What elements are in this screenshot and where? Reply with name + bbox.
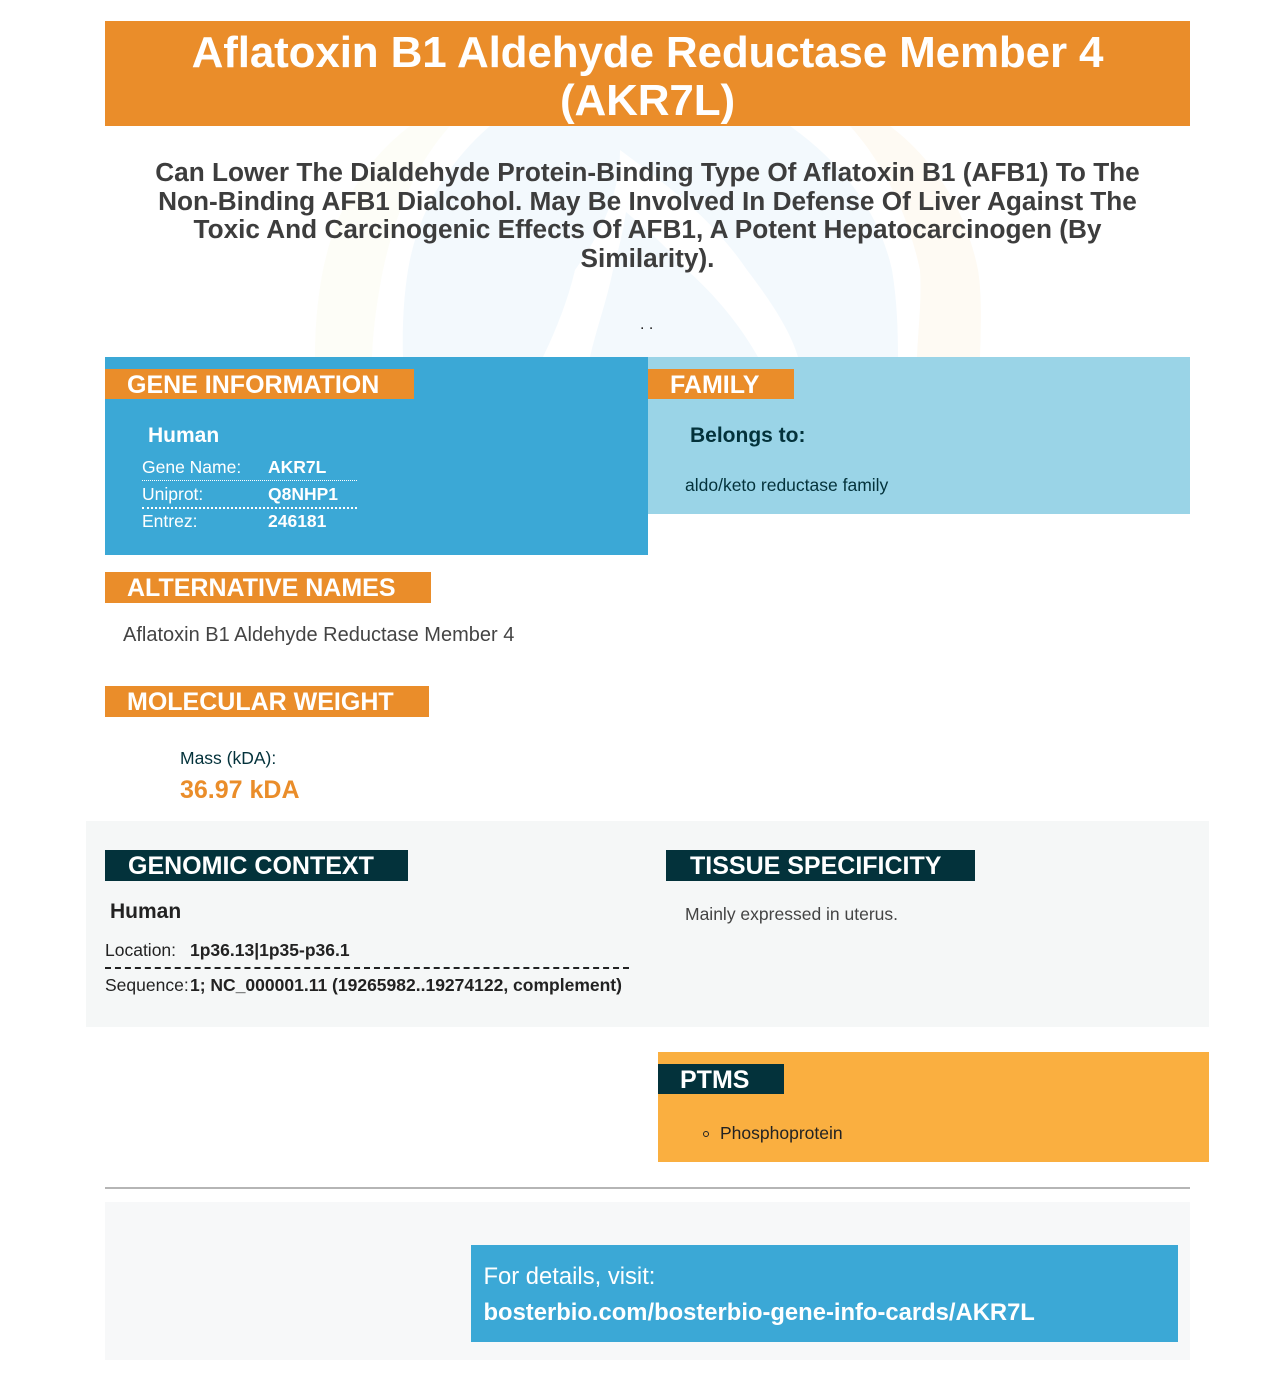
panel: molecular weight [105, 686, 429, 804]
subtitle description: Toxic And Carcinogenic Effects Of AFB1, A Potent Hepatocarcinogen (By [194, 214, 1101, 244]
panel: gene information [105, 357, 648, 555]
subtitle description: Similarity). [581, 243, 714, 273]
subtitle description [155, 157, 1140, 273]
heading: gene information: GENE INFORMATION [127, 371, 379, 399]
sequence row: Sequence: [105, 975, 189, 995]
heading: ptms: PTMS [680, 1066, 749, 1094]
family value: aldo/keto reductase family [685, 475, 888, 495]
dots note: . . [640, 316, 653, 333]
location row: Location: [105, 940, 176, 960]
sequence row: 1; NC_000001.11 (19265982..19274122, complement) [190, 975, 622, 995]
gene info table: Entrez: [142, 511, 197, 531]
divider [105, 967, 629, 969]
title banner [105, 21, 1190, 126]
alternative name text: Aflatoxin B1 Aldehyde Reductase Member 4 [123, 624, 514, 646]
callout: details link [471, 1245, 1178, 1342]
location row: 1p36.13|1p35-p36.1 [190, 940, 350, 960]
mass label: Mass (kDA): [180, 748, 276, 768]
background watermark [403, 126, 981, 357]
visit label: For details, visit: [484, 1263, 655, 1290]
gene info table: Uniprot: [142, 484, 203, 504]
gene info table: Q8NHP1 [268, 484, 338, 504]
gene info table [142, 457, 357, 531]
ptm item: Phosphoprotein [720, 1123, 843, 1143]
heading: genomic context: GENOMIC CONTEXT [128, 852, 374, 880]
heading: family [648, 369, 794, 399]
species label: Human [110, 900, 181, 923]
heading: alternative names: ALTERNATIVE NAMES [127, 574, 396, 602]
heading: molecular weight: MOLECULAR WEIGHT [127, 688, 394, 716]
belongs to label: Belongs to: [690, 424, 806, 447]
panel: footer [105, 1202, 1190, 1360]
subtitle description: Can Lower The Dialdehyde Protein-Binding Type Of Aflatoxin B1 (AFB1) To The [155, 157, 1140, 187]
heading: family: FAMILY [670, 371, 759, 399]
panel: ptms [658, 1052, 1209, 1162]
ptm bullet icon [703, 1131, 709, 1137]
panel: genomic context and tissue specificity [86, 821, 1209, 1027]
heading: tissue specificity: TISSUE SPECIFICITY [690, 852, 941, 880]
mass value: 36.97 kDA [180, 776, 300, 804]
species label: Human [148, 424, 219, 447]
title banner: (AKR7L) [560, 76, 735, 124]
subtitle description: Non-Binding AFB1 Dialcohol. May Be Involved In Defense Of Liver Against The [158, 186, 1137, 216]
title banner: Aflatoxin B1 Aldehyde Reductase Member 4 [192, 28, 1103, 76]
panel: alternative names [105, 572, 514, 646]
gene info table: Gene Name: [142, 457, 241, 477]
location row [105, 940, 350, 960]
gene info table: AKR7L [268, 457, 326, 477]
url: bosterbio.com/bosterbio-gene-info-cards/AKR7L [484, 1299, 1035, 1326]
gene info table: 246181 [268, 511, 326, 531]
heading: ptms [658, 1064, 784, 1094]
panel: family [648, 357, 1190, 514]
tissue specificity text: Mainly expressed in uterus. [685, 904, 898, 924]
